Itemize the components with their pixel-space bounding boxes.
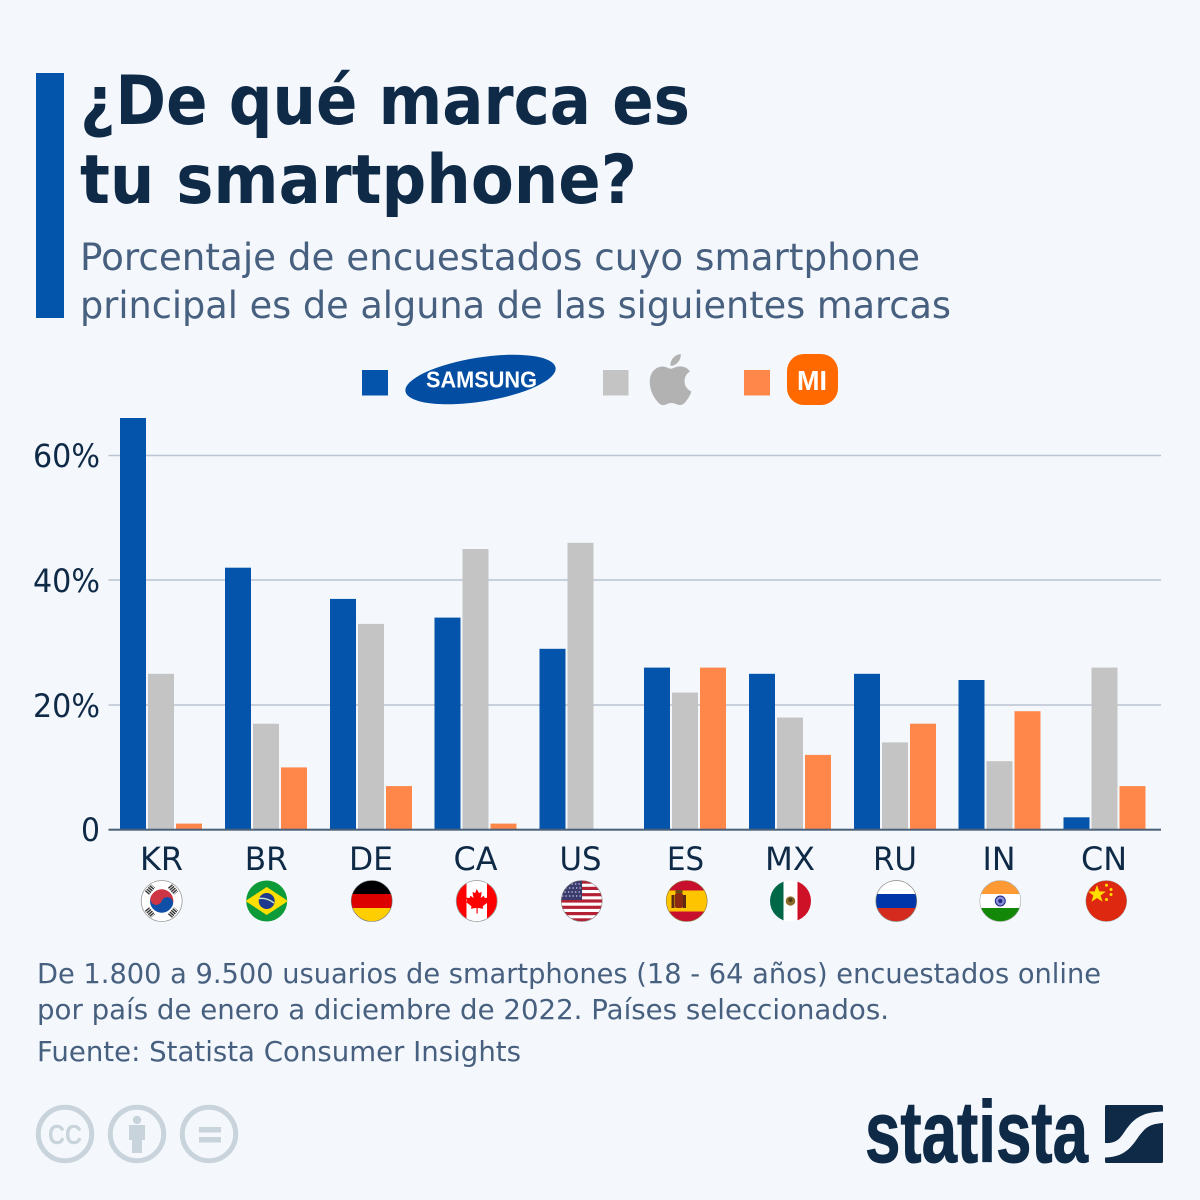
y axis labels: 40% xyxy=(33,562,100,600)
flag: Russia xyxy=(875,880,918,922)
flag: China xyxy=(1085,880,1128,922)
x axis country labels: IN xyxy=(982,840,1016,878)
license icons xyxy=(38,1107,236,1161)
bars: ES xyxy=(644,668,726,830)
subtitle xyxy=(80,236,951,327)
legend: Samsung xyxy=(362,346,559,413)
title: ¿De qué marca es xyxy=(80,62,690,141)
flag: South Korea xyxy=(141,880,183,922)
subtitle: Porcentaje de encuestados cuyo smartphone xyxy=(80,236,920,279)
flag: India xyxy=(979,880,1022,922)
x axis country labels: RU xyxy=(873,840,917,878)
x axis country labels: ES xyxy=(667,840,704,878)
legend: Xiaomi xyxy=(744,354,838,405)
title: tu smartphone? xyxy=(80,141,637,220)
wordmark: statista xyxy=(865,1084,1088,1181)
y axis labels: 0 xyxy=(81,811,100,849)
y axis labels xyxy=(33,437,100,849)
y axis labels: 60% xyxy=(33,437,100,475)
footnote: por país de enero a diciembre de 2022. Países seleccionados. xyxy=(37,994,889,1026)
legend xyxy=(362,346,838,413)
flag: United States xyxy=(561,880,603,922)
bars: RU xyxy=(854,674,936,830)
legend: Xiaomi: MI xyxy=(797,365,827,396)
flag: Mexico xyxy=(770,880,812,922)
y axis gridlines xyxy=(108,456,1161,705)
flag: Spain xyxy=(666,880,708,922)
x axis country labels: US xyxy=(560,840,602,878)
icon: attribution xyxy=(110,1107,164,1161)
title xyxy=(80,62,690,220)
icon: creative commons xyxy=(38,1107,92,1161)
legend: Samsung: SAMSUNG xyxy=(426,366,537,392)
legend: Apple xyxy=(603,354,691,405)
flags xyxy=(141,880,1128,922)
bars: DE xyxy=(330,599,412,830)
flag: Canada xyxy=(456,880,498,922)
source: Fuente: Statista Consumer Insights xyxy=(37,1036,521,1068)
footnote: De 1.800 a 9.500 usuarios de smartphones (18 - 64 años) encuestados online xyxy=(37,958,1101,990)
x axis country labels: KR xyxy=(140,840,183,878)
accent bar xyxy=(36,73,64,318)
x axis country labels: BR xyxy=(245,840,288,878)
icon: statista mark xyxy=(1105,1105,1163,1163)
x axis country labels: CA xyxy=(454,840,498,878)
bars: US xyxy=(540,543,594,830)
subtitle: principal es de alguna de las siguientes marcas xyxy=(80,284,951,327)
bars: KR xyxy=(120,418,202,830)
footnote xyxy=(37,958,1101,1026)
x axis country labels: DE xyxy=(349,840,393,878)
flag: Germany xyxy=(351,880,393,922)
x axis country labels: MX xyxy=(765,840,815,878)
bars: IN xyxy=(958,680,1040,830)
chart: bars by country xyxy=(33,418,1161,878)
flag: Brazil xyxy=(245,880,288,922)
y axis labels: 20% xyxy=(33,687,100,725)
bars: CN xyxy=(1064,668,1146,830)
icon: creative commons: CC xyxy=(48,1119,82,1150)
x axis line xyxy=(108,829,1161,831)
bars: BR xyxy=(225,568,307,830)
x axis country labels xyxy=(140,840,1127,878)
icon: no derivatives xyxy=(182,1107,236,1161)
statista logo xyxy=(865,1084,1163,1181)
bars: MX xyxy=(749,674,831,830)
bars: CA xyxy=(434,549,516,830)
x axis country labels: CN xyxy=(1081,840,1127,878)
